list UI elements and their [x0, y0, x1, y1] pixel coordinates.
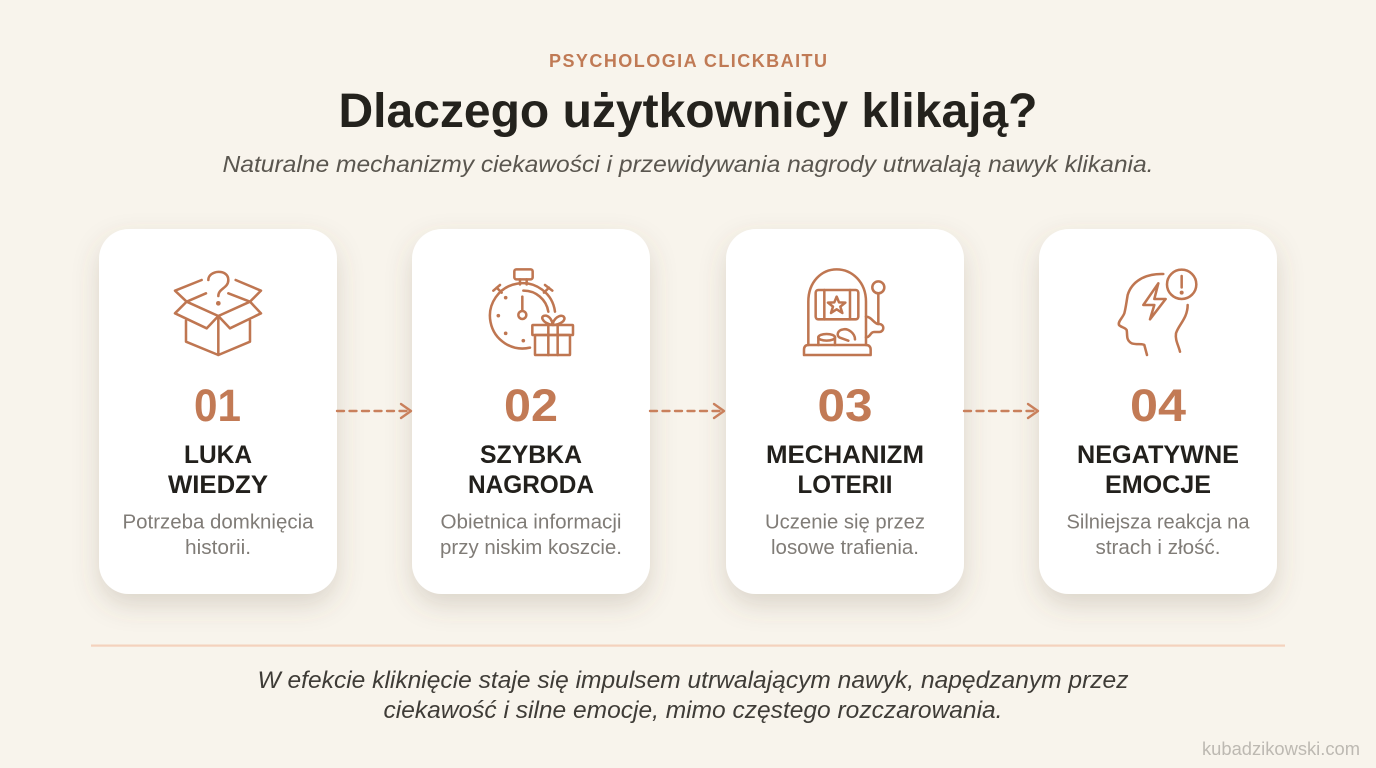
arrow: 03 to 04: [964, 404, 1038, 418]
heading: SZYBKA: [480, 441, 582, 469]
heading: LOTERII: [798, 471, 892, 499]
description: Uczenie się przez: [765, 512, 925, 534]
panel: card 03 mechanizm loterii: [726, 229, 964, 594]
arrow: 02 to 03: [650, 404, 724, 418]
heading: MECHANIZM: [766, 441, 924, 469]
description: [1066, 512, 1250, 559]
arrow: 01 to 02: [337, 404, 411, 418]
heading: LUKA: [184, 441, 252, 469]
number 04: 04: [1130, 380, 1186, 431]
description: przy niskim koszcie.: [440, 537, 622, 559]
description: Silniejsza reakcja na: [1066, 512, 1250, 534]
conclusion text: ciekawość i silne emocje, mimo częstego rozczarowania.: [384, 697, 1002, 724]
heading: NAGRODA: [468, 471, 594, 499]
title: Dlaczego użytkownicy klikają?: [338, 85, 1038, 138]
description: [765, 512, 925, 559]
description: historii.: [185, 537, 251, 559]
heading: EMOCJE: [1105, 471, 1211, 499]
heading: [468, 441, 594, 499]
icon: open box with question mark: [175, 272, 261, 355]
panel: card 04 negatywne emocje: [1039, 229, 1277, 594]
heading: [168, 441, 268, 499]
subtitle: Naturalne mechanizmy ciekawości i przewidywania nagrody utrwalają nawyk klikania.: [222, 151, 1154, 177]
icon: slot machine: [804, 269, 884, 355]
eyebrow label: PSYCHOLOGIA CLICKBAITU: [549, 51, 827, 71]
description: losowe trafienia.: [771, 537, 919, 559]
heading: [1077, 441, 1239, 499]
panel: card 01 luka wiedzy: [99, 229, 337, 594]
description: Obietnica informacji: [440, 512, 622, 534]
watermark: kubadzikowski.com: [1202, 739, 1360, 759]
icon: stopwatch with gift: [490, 269, 573, 355]
heading: [766, 441, 924, 499]
panel: card 02 szybka nagroda: [412, 229, 650, 594]
number 02: 02: [504, 380, 558, 431]
conclusion text: [258, 667, 1128, 724]
description: Potrzeba domknięcia: [122, 512, 314, 534]
icon: head with lightning and alert: [1119, 270, 1196, 355]
number 01: 01: [194, 380, 241, 431]
description: strach i złość.: [1096, 537, 1220, 559]
heading: WIEDZY: [168, 471, 268, 499]
number 03: 03: [818, 380, 872, 431]
description: [122, 512, 314, 559]
conclusion text: W efekcie kliknięcie staje się impulsem utrwalającym nawyk, napędzanym przez: [258, 667, 1128, 694]
heading: NEGATYWNE: [1077, 441, 1239, 469]
description: [440, 512, 622, 559]
